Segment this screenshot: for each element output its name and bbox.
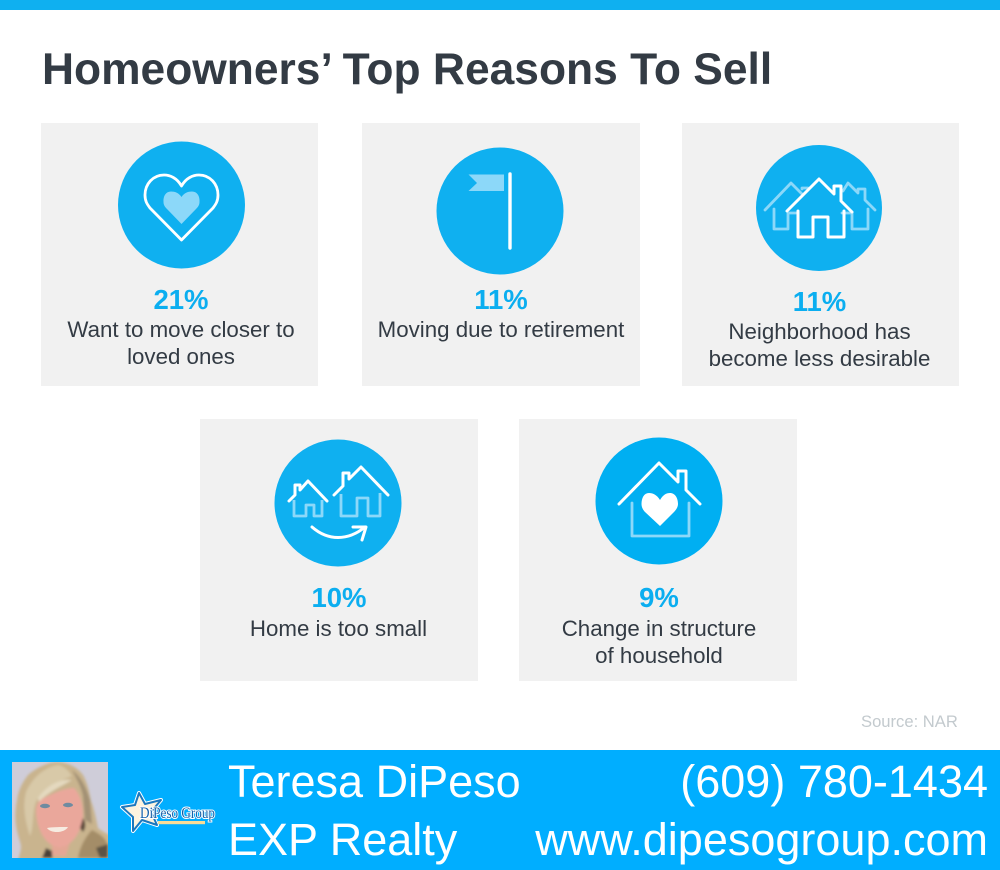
icon: flag [436,148,564,274]
panel: moving due to retirement [362,123,640,386]
stat: 11%: 11% [793,286,846,317]
source note: Source: NAR [861,712,958,731]
label: neighborhood [709,319,930,371]
label: neighborhood: become less desirable [709,346,930,371]
icon: house with heart [596,438,722,564]
label: neighborhood: Neighborhood has [728,319,911,344]
logo: DiPeso Group: DiPeso Group [140,805,215,822]
website: www.dipesogroup.com [535,814,988,865]
label: want to move closer [67,317,295,369]
panel: home too small [200,419,478,681]
title: Homeowners’ Top Reasons To Sell [42,45,772,94]
agent name: Teresa DiPeso [228,756,521,807]
stat: 9%: 9% [639,582,679,613]
icon: neighborhood houses [756,145,882,271]
panel: move closer to loved ones [41,123,318,386]
footer band [0,750,1000,870]
top accent bar [0,0,1000,10]
label: change in structure [562,616,756,668]
label: change in structure: of household [595,643,723,668]
label: want to move closer: loved ones [127,344,235,369]
logo: DiPeso Group [120,791,216,834]
label: home too small: Home is too small [250,616,427,641]
panel: change in household [519,419,797,681]
stat: 21%: 21% [153,284,209,315]
label: want to move closer: Want to move closer to [67,317,295,342]
agent photo [12,762,108,858]
phone number: (609) 780-1434 [680,756,988,807]
label: change in structure: Change in structure [562,616,756,641]
panel: neighborhood less desirable [682,123,959,386]
stat: 10%: 10% [311,582,367,613]
brokerage: EXP Realty [228,814,457,865]
stat: 11%: 11% [474,284,528,315]
icon: heart [118,142,245,268]
icon: small to bigger house [274,440,402,566]
label: retirement: Moving due to retirement [378,317,624,342]
